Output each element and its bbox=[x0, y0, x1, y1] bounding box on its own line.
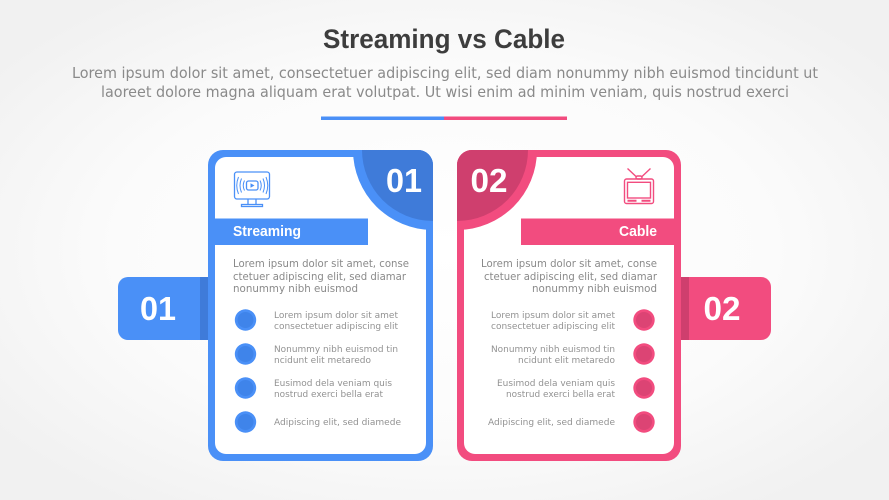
description: streaming: Lorem ipsum dolor sit amet, conse bbox=[233, 257, 409, 270]
corner badge: 01: 01 bbox=[386, 162, 422, 199]
description: cable: Lorem ipsum dolor sit amet, conse bbox=[481, 257, 657, 270]
subtitle: Lorem ipsum dolor sit amet, consectetuer adipiscing elit, sed diam nonummy nibh euismod tincidunt ut bbox=[72, 65, 818, 82]
corner badge: 02: 02 bbox=[470, 162, 508, 199]
side tab: 01 bbox=[118, 277, 208, 340]
subtitle: laoreet dolore magna aliquam erat volutpat. Ut wisi enim ad minim veniam, quis nostrud exerci bbox=[101, 84, 789, 101]
icon: television bbox=[624, 168, 654, 204]
heading banner: streaming: Streaming bbox=[233, 223, 301, 240]
list item 4 bbox=[235, 411, 401, 433]
description: streaming bbox=[233, 257, 409, 295]
description: cable bbox=[481, 257, 658, 295]
list item 2: ncidunt elit metaredo bbox=[518, 356, 615, 366]
list item 2 bbox=[491, 343, 655, 366]
list item 2: Nonummy nibh euismod tin bbox=[274, 345, 398, 355]
corner badge: 01 bbox=[353, 150, 433, 230]
side tab: 02: 02 bbox=[704, 290, 740, 327]
list item 1: consectetuer adipiscing elit bbox=[491, 322, 615, 332]
list item 4: Adipiscing elit, sed diamede bbox=[274, 418, 401, 428]
panel: cable bbox=[457, 150, 681, 461]
heading banner: streaming bbox=[215, 218, 368, 245]
side tab: 02 bbox=[681, 277, 771, 340]
list item 2: Nonummy nibh euismod tin bbox=[491, 345, 615, 355]
description: streaming: ctetuer adipiscing elit, sed diamar bbox=[233, 270, 407, 283]
list item 4: Adipiscing elit, sed diamede bbox=[488, 418, 615, 428]
heading banner: cable bbox=[521, 218, 674, 245]
title: Streaming vs Cable bbox=[323, 24, 565, 54]
list item 1: Lorem ipsum dolor sit amet bbox=[274, 311, 398, 321]
list item 1: Lorem ipsum dolor sit amet bbox=[491, 311, 615, 321]
list item 3 bbox=[235, 377, 392, 400]
side tab: 01: 01 bbox=[140, 290, 176, 327]
panel: streaming bbox=[208, 150, 433, 461]
description: cable: nonummy nibh euismod bbox=[532, 282, 657, 295]
heading banner: cable: Cable bbox=[619, 223, 657, 240]
list item 1: consectetuer adipiscing elit bbox=[274, 322, 398, 332]
list item 2 bbox=[235, 343, 398, 366]
list item 3 bbox=[497, 377, 655, 400]
title underline bbox=[321, 116, 567, 120]
list item 2: ncidunt elit metaredo bbox=[274, 356, 371, 366]
corner badge: 02 bbox=[457, 150, 537, 230]
icon: streaming monitor bbox=[234, 172, 270, 206]
description: streaming: nonummy nibh euismod bbox=[233, 282, 358, 295]
list item 1 bbox=[235, 309, 398, 332]
infographic bbox=[73, 28, 818, 461]
list item 4 bbox=[488, 411, 655, 433]
list item 1 bbox=[491, 309, 655, 332]
list item 3: nostrud exerci bella erat bbox=[274, 390, 383, 400]
description: cable: ctetuer adipiscing elit, sed diamar bbox=[484, 270, 658, 283]
list item 3: nostrud exerci bella erat bbox=[506, 390, 615, 400]
subtitle bbox=[72, 65, 818, 101]
list item 3: Eusimod dela veniam quis bbox=[497, 379, 615, 389]
list item 3: Eusimod dela veniam quis bbox=[274, 379, 392, 389]
